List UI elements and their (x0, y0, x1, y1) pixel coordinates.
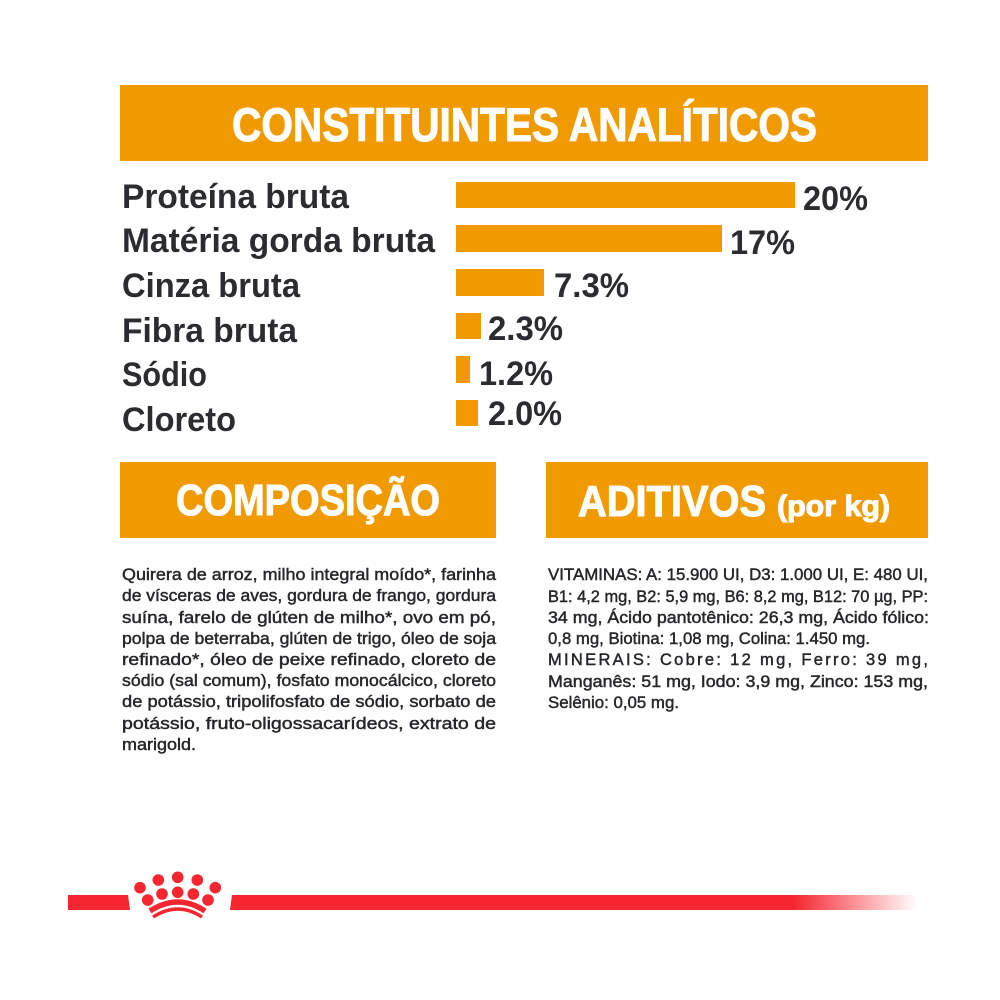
text block: composição: marigold. (122, 736, 196, 754)
heading banner: constituintes analíticos: CONSTITUINTES ANALÍTICOS (232, 98, 817, 151)
row: matéria gorda bruta 17%: 17% (730, 224, 795, 262)
row: proteína bruta 20% (122, 178, 868, 218)
text block: composição: de potássio, tripolifosfato de sódio, sorbato de (122, 693, 496, 711)
heading banner: aditivos por kg: (por kg) (777, 490, 890, 523)
text block: composição: Quirera de arroz, milho integral moído*, farinha (122, 566, 497, 584)
row: proteína bruta 20%: 20% (803, 180, 868, 218)
row: cloreto 2.0% (122, 395, 562, 439)
text block: aditivos: Selênio: 0,05 mg. (548, 694, 679, 712)
row: cinza bruta 7.3% (122, 267, 629, 305)
row: matéria gorda bruta 17%: Matéria gorda bruta (122, 222, 436, 260)
bar chart: analytical constituents (122, 178, 868, 439)
row: matéria gorda bruta 17% (122, 222, 795, 262)
footer red line left (68, 895, 130, 910)
text block: composição: de vísceras de aves, gordura de frango, gordura (122, 587, 497, 605)
text block: composição: refinado*, óleo de peixe refinado, cloreto de (122, 651, 496, 669)
text block: composição: sódio (sal comum), fosfato monocálcico, cloreto (122, 672, 496, 690)
panel: aditivos (546, 462, 929, 712)
text block: aditivos: 0,8 mg, Biotina: 1,08 mg, Colina: 1.450 mg. (548, 630, 870, 648)
row: fibra bruta 2.3%: Fibra bruta (122, 312, 298, 350)
text block: aditivos: Manganês: 51 mg, Iodo: 3,9 mg, Zinco: 153 mg, (548, 673, 928, 691)
text block: aditivos: 34 mg, Ácido pantotênico: 26,3 mg, Ácido fólico: (548, 608, 929, 627)
row: sódio 1.2%: Sódio (122, 356, 207, 394)
heading banner: aditivos por kg (546, 462, 928, 538)
row: proteína bruta 20%: Proteína bruta (122, 178, 350, 216)
text block: aditivos: VITAMINAS: A: 15.900 UI, D3: 1.000 UI, E: 480 UI, (548, 566, 928, 584)
row: cloreto 2.0%: Cloreto (122, 401, 236, 439)
text block: composição: suína, farelo de glúten de milho*, ovo em pó, (122, 609, 496, 627)
heading banner: composição (120, 462, 496, 538)
text block: aditivos (548, 566, 929, 712)
text block: composição: potássio, fruto-oligossacarídeos, extrato de (122, 715, 496, 733)
text block: aditivos: B1: 4,2 mg, B2: 5,9 mg, B6: 8,2 mg, B12: 70 µg, PP: (548, 588, 928, 606)
row: fibra bruta 2.3% (122, 310, 563, 350)
row: sódio 1.2%: 1.2% (479, 355, 553, 393)
heading banner: aditivos por kg: ADITIVOS (578, 477, 766, 526)
row: cinza bruta 7.3%: 7.3% (554, 267, 629, 305)
row: sódio 1.2% (122, 355, 553, 394)
icon: royal canin crown logo (134, 872, 221, 917)
row: cloreto 2.0%: 2.0% (488, 395, 562, 433)
panel: constituintes analíticos (120, 85, 928, 439)
text block: aditivos: MINERAIS: Cobre: 12 mg, Ferro: 39 mg, (548, 651, 928, 669)
text block: composição (122, 566, 497, 754)
heading banner: composição: COMPOSIÇÃO (176, 475, 440, 525)
heading banner: constituintes analíticos (120, 85, 928, 161)
row: fibra bruta 2.3%: 2.3% (488, 310, 563, 348)
text block: composição: polpa de beterraba, glúten de trigo, óleo de soja (122, 630, 497, 648)
footer red line right with fade (230, 895, 917, 910)
panel: composição (120, 462, 497, 754)
row: cinza bruta 7.3%: Cinza bruta (122, 267, 301, 305)
